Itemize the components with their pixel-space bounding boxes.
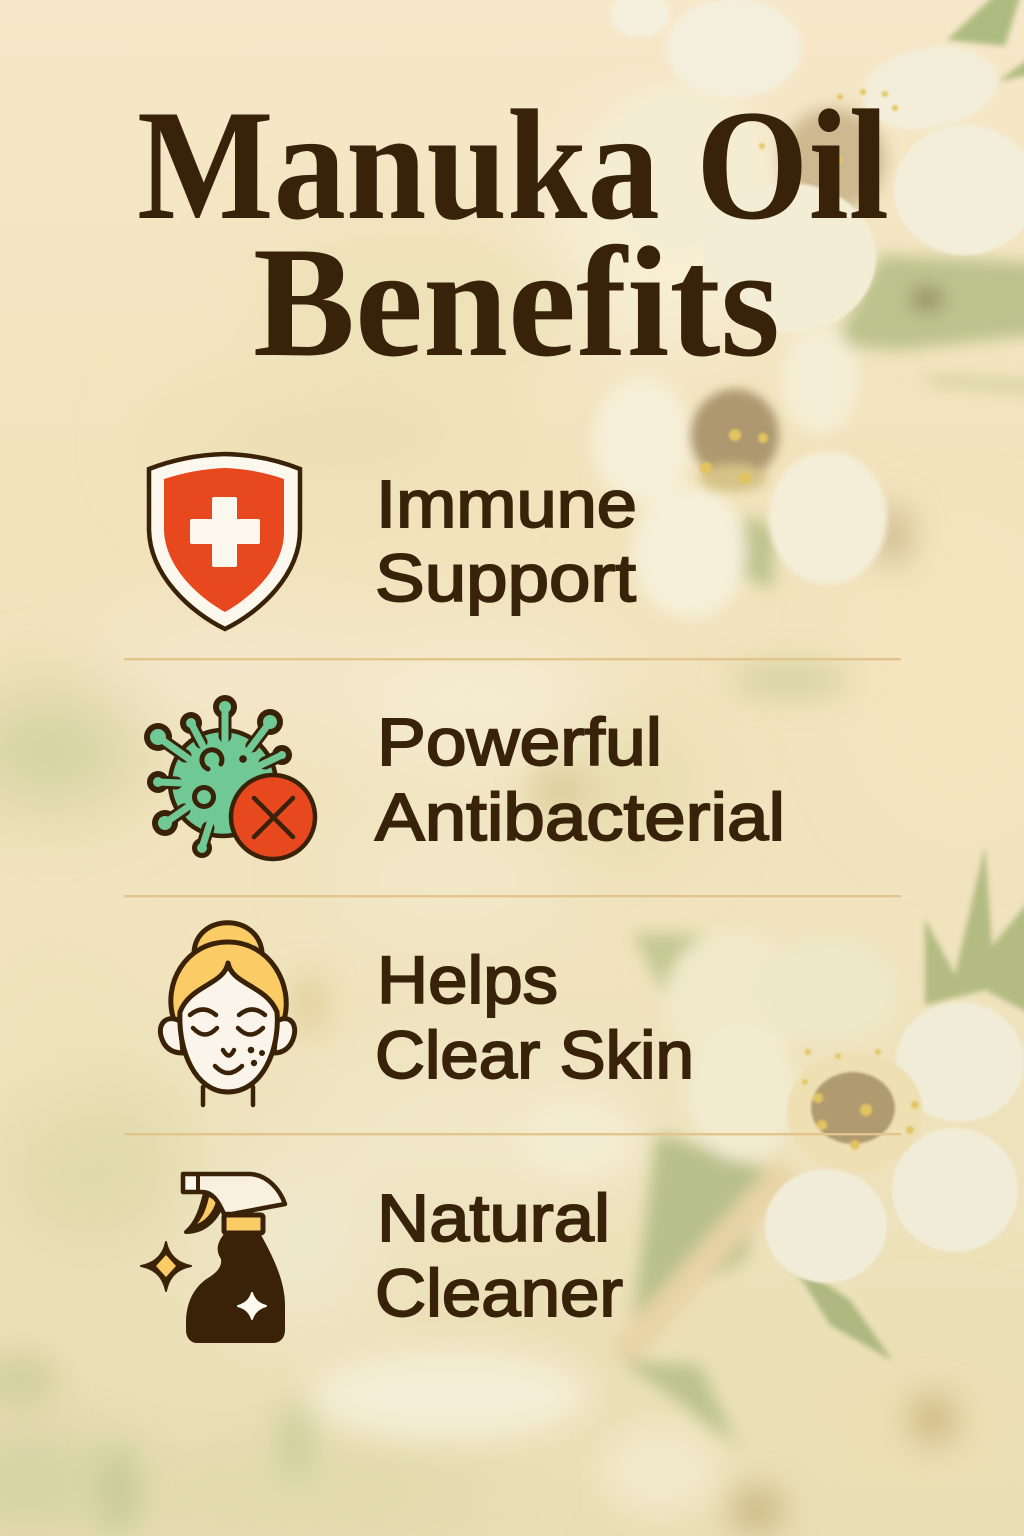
label: natural cleaner: Natural	[377, 1181, 610, 1256]
label: powerful antibacterial	[375, 705, 785, 855]
item: natural cleaner	[141, 1174, 623, 1343]
divider	[124, 658, 901, 660]
title: Manuka Oil	[137, 78, 889, 253]
item: helps clear skin	[160, 923, 694, 1105]
label: powerful antibacterial: Powerful	[377, 705, 662, 780]
label: immune support	[375, 467, 637, 616]
label: natural cleaner	[375, 1181, 623, 1331]
icon: virus with red x	[144, 695, 315, 859]
icon: sparkle	[141, 1242, 191, 1291]
label: helps clear skin: Clear Skin	[375, 1018, 694, 1093]
label: natural cleaner: Cleaner	[375, 1256, 623, 1331]
label: helps clear skin	[375, 943, 694, 1093]
label: immune support: Support	[375, 541, 636, 616]
icon: shield with cross	[149, 454, 300, 629]
item: powerful antibacterial	[144, 695, 785, 859]
label: immune support: Immune	[376, 467, 637, 542]
label: powerful antibacterial: Antibacterial	[375, 780, 785, 855]
item: immune support	[149, 454, 637, 629]
divider	[124, 1133, 901, 1135]
icon: woman's face	[160, 923, 295, 1105]
title	[137, 78, 889, 390]
divider	[124, 895, 901, 897]
title: Benefits	[253, 215, 780, 390]
icon: spray bottle	[141, 1174, 285, 1343]
label: helps clear skin: Helps	[377, 943, 558, 1018]
